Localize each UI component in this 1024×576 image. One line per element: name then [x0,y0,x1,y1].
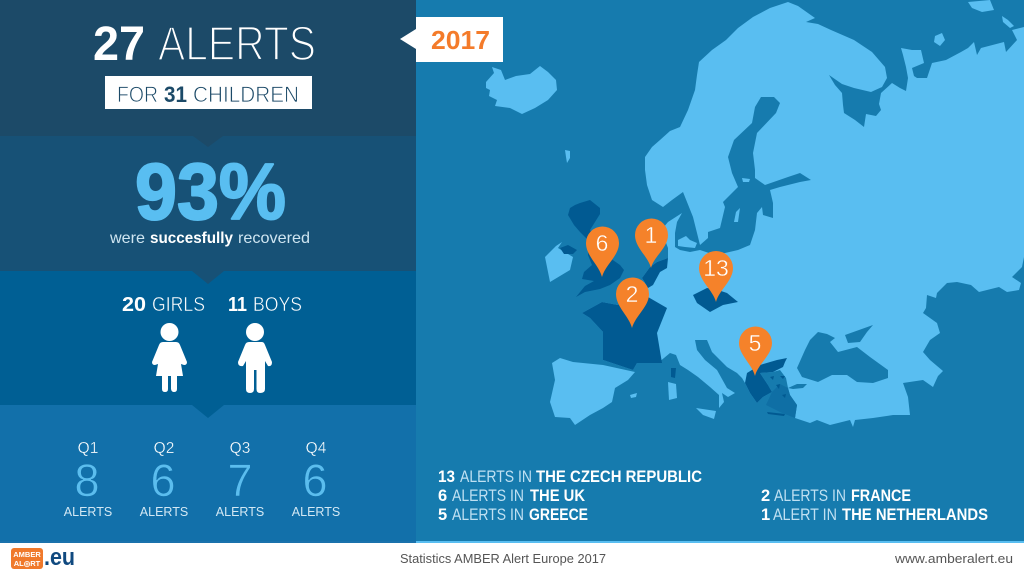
subtitle box: for 31 children: FOR [117,82,158,107]
quarter Q4: Q4 [306,440,327,457]
quarter Q2: 6 [150,455,176,506]
subtitle box: for 31 children: 31 [164,82,187,107]
quarter Q3 [216,440,264,519]
big stat 93%: 93% [135,147,286,236]
map: Greece highlighted [745,358,787,403]
panel: recovered [0,136,416,284]
list row: UK: 6 [438,487,447,505]
footer url: www.amberalert.eu [894,551,1013,566]
pin: Greece 5 alerts [739,327,772,376]
pin: UK 6 alerts: 6 [596,230,608,256]
quarter Q1 [64,440,112,519]
subtitle box: for 31 children: CHILDREN [193,82,299,107]
quarter Q1: Q1 [78,440,98,457]
icon: boy [238,323,272,393]
list row: Czech Republic: THE CZECH REPUBLIC [536,468,702,486]
title: 27 alerts: ALERTS [158,18,316,71]
footer caption: Statistics AMBER Alert Europe 2017 [400,551,606,566]
list row: Netherlands: 1 [761,506,770,524]
list row: Czech Republic [438,468,702,486]
quarter Q2: ALERTS [140,505,188,519]
quarter Q4: 6 [302,455,328,506]
map: Northern Ireland highlighted [560,245,577,254]
heading: boys count: 11 [228,294,247,316]
caption: were succesfully recovered: recovered [238,230,310,247]
list row: UK: ALERTS IN [452,487,524,505]
map: Sea of Marmara [788,384,807,389]
list row: Netherlands: THE NETHERLANDS [842,506,988,524]
quarter Q2 [140,440,188,519]
map panel [416,0,1024,541]
pin: Netherlands 1 alert [635,219,668,268]
panel: girls and boys [0,271,416,418]
list row: France: 2 [761,487,770,505]
list row: Netherlands [761,506,988,524]
list row: France: FRANCE [851,487,911,505]
heading: girls count: GIRLS [152,294,205,316]
country alert list [438,468,988,524]
logo: AMBER Alert: AL◎RT [14,559,41,568]
list row: Greece [438,506,588,524]
list row: Greece: 5 [438,506,447,524]
year tag 2017: 2017 [431,25,490,55]
heading: girls count: 20 [122,294,146,316]
quarter Q1: ALERTS [64,505,112,519]
caption: were succesfully recovered [109,230,310,247]
map: Aegean Sea shading [766,384,797,418]
map: Iceland [486,66,557,114]
map: Ireland [545,242,573,282]
pin: Greece 5 alerts: 5 [749,330,761,356]
arrow: pointer to gender panel [192,271,224,284]
map: Corsica and Greek islands [671,368,786,416]
title: 27 alerts [93,18,316,71]
logo: AMBER Alert [11,544,75,571]
list row: France: ALERTS IN [774,487,846,505]
quarter Q1: 8 [74,455,100,506]
quarter Q3: Q3 [230,440,250,457]
arrow: pointer to recovered panel [193,136,223,147]
quarter Q3: 7 [227,455,253,506]
panel: quarters [0,405,416,541]
list row: Greece: GREECE [529,506,588,524]
title: 27 alerts: 27 [93,18,145,71]
pin: Netherlands 1 alert: 1 [645,222,657,248]
footer [0,541,1024,576]
map: Europe mainland [582,2,1024,427]
quarter Q3: ALERTS [216,505,264,519]
pin: Czech Republic 13 alerts: 13 [703,255,729,281]
pin: UK 6 alerts [586,226,619,277]
heading: boys count: BOYS [253,294,302,316]
caption: were succesfully recovered: were [109,230,145,247]
map: small islands [565,0,1014,419]
map: United Kingdom highlighted [568,200,624,297]
map: Sea of Azov [845,325,873,343]
list row: Czech Republic: ALERTS IN [460,468,532,486]
quarter Q4 [292,440,340,519]
arrow: pointer to quarters [192,405,224,418]
pin: Czech Republic 13 alerts [699,251,733,302]
panel: alerts total [0,0,416,147]
logo: AMBER Alert: .eu [44,544,75,571]
heading: boys count [228,294,302,316]
map: Spain and Portugal [550,358,635,425]
year tag 2017 [400,17,503,62]
logo: AMBER Alert: AMBER [13,550,41,559]
caption: were succesfully recovered: succesfully [150,230,233,247]
map: France highlighted [582,297,667,370]
list row: Czech Republic: 13 [438,468,455,486]
heading: girls count [122,294,205,316]
list row: France [761,487,911,505]
pin: France 2 alerts: 2 [626,281,638,307]
list row: UK: THE UK [530,487,585,505]
subtitle box: for 31 children [105,76,312,109]
map: Black Sea [797,332,888,383]
quarter Q2: Q2 [154,440,174,457]
list row: Greece: ALERTS IN [452,506,524,524]
list row: Netherlands: ALERT IN [773,506,837,524]
pin: France 2 alerts [616,278,649,328]
list row: UK [438,487,585,505]
quarter Q4: ALERTS [292,505,340,519]
map: Czech Republic highlighted [693,288,738,312]
icon: girl [152,323,187,392]
map: Netherlands highlighted [642,258,668,288]
